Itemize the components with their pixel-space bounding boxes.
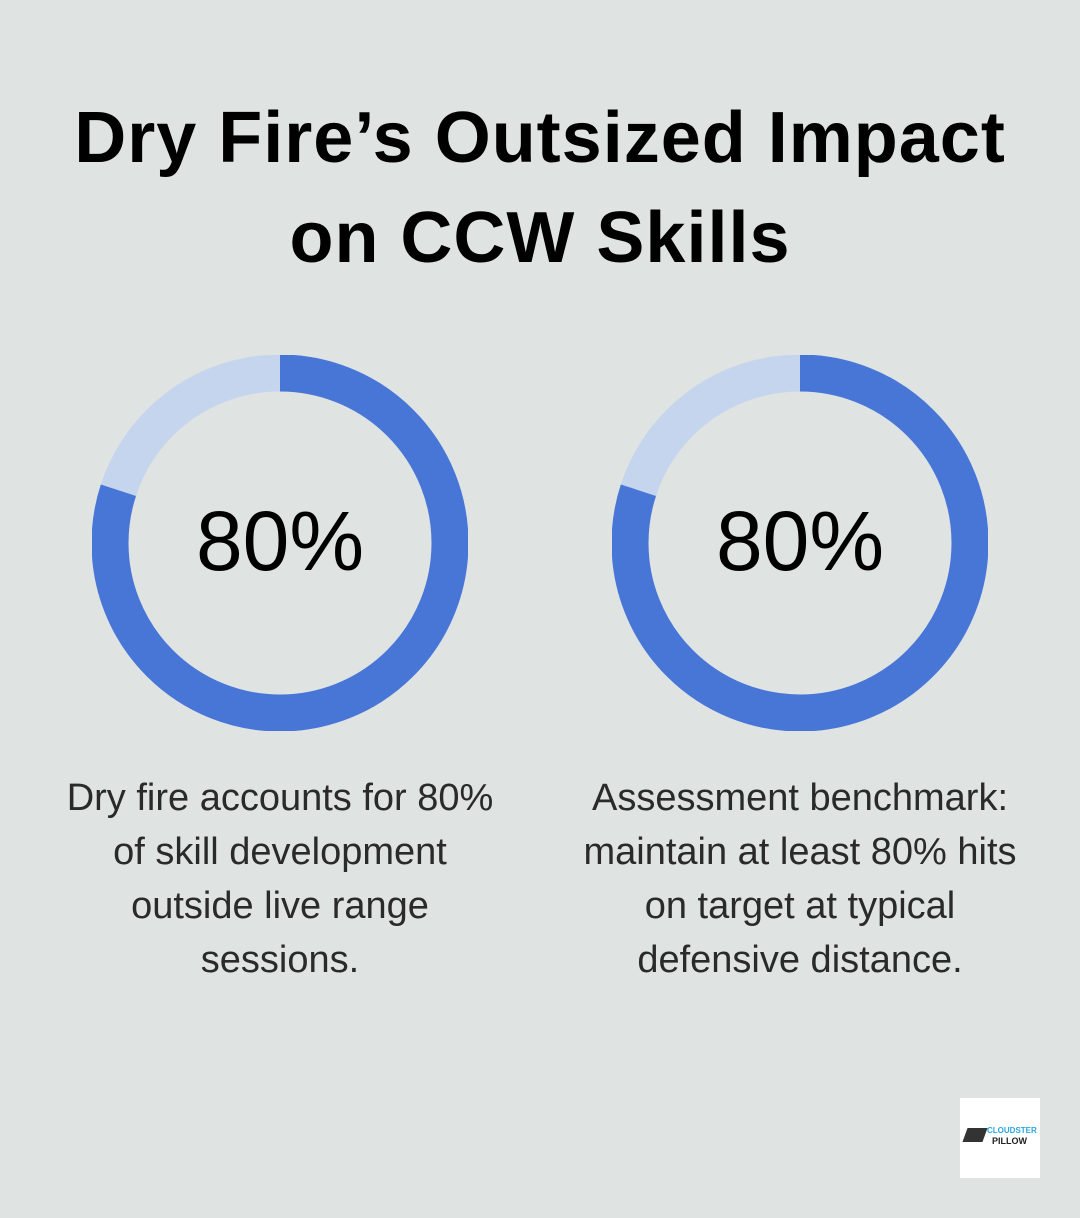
donut: right	[612, 355, 988, 731]
title: on CCW Skills	[289, 198, 791, 278]
text: left description: sessions.	[201, 939, 359, 981]
text: left description: of skill development	[113, 831, 447, 873]
logo: CLOUDSTER	[987, 1126, 1037, 1135]
text: left description: Dry fire accounts for 80%	[67, 777, 493, 819]
text: left description: outside live range	[131, 885, 429, 927]
text: right description: defensive distance.	[637, 939, 963, 981]
logo: PILLOW	[992, 1136, 1027, 1146]
title	[74, 98, 1006, 278]
text: left description	[67, 777, 493, 981]
donut: left	[92, 355, 468, 731]
logo	[960, 1098, 1040, 1178]
percentage: right: 80%	[716, 494, 884, 588]
percentage: left: 80%	[196, 494, 364, 588]
text: right description: maintain at least 80% hits	[583, 831, 1016, 873]
text: right description: on target at typical	[645, 885, 955, 927]
text: right description: Assessment benchmark:	[592, 777, 1008, 819]
text: right description	[583, 777, 1016, 981]
title: Dry Fire’s Outsized Impact	[74, 98, 1006, 178]
